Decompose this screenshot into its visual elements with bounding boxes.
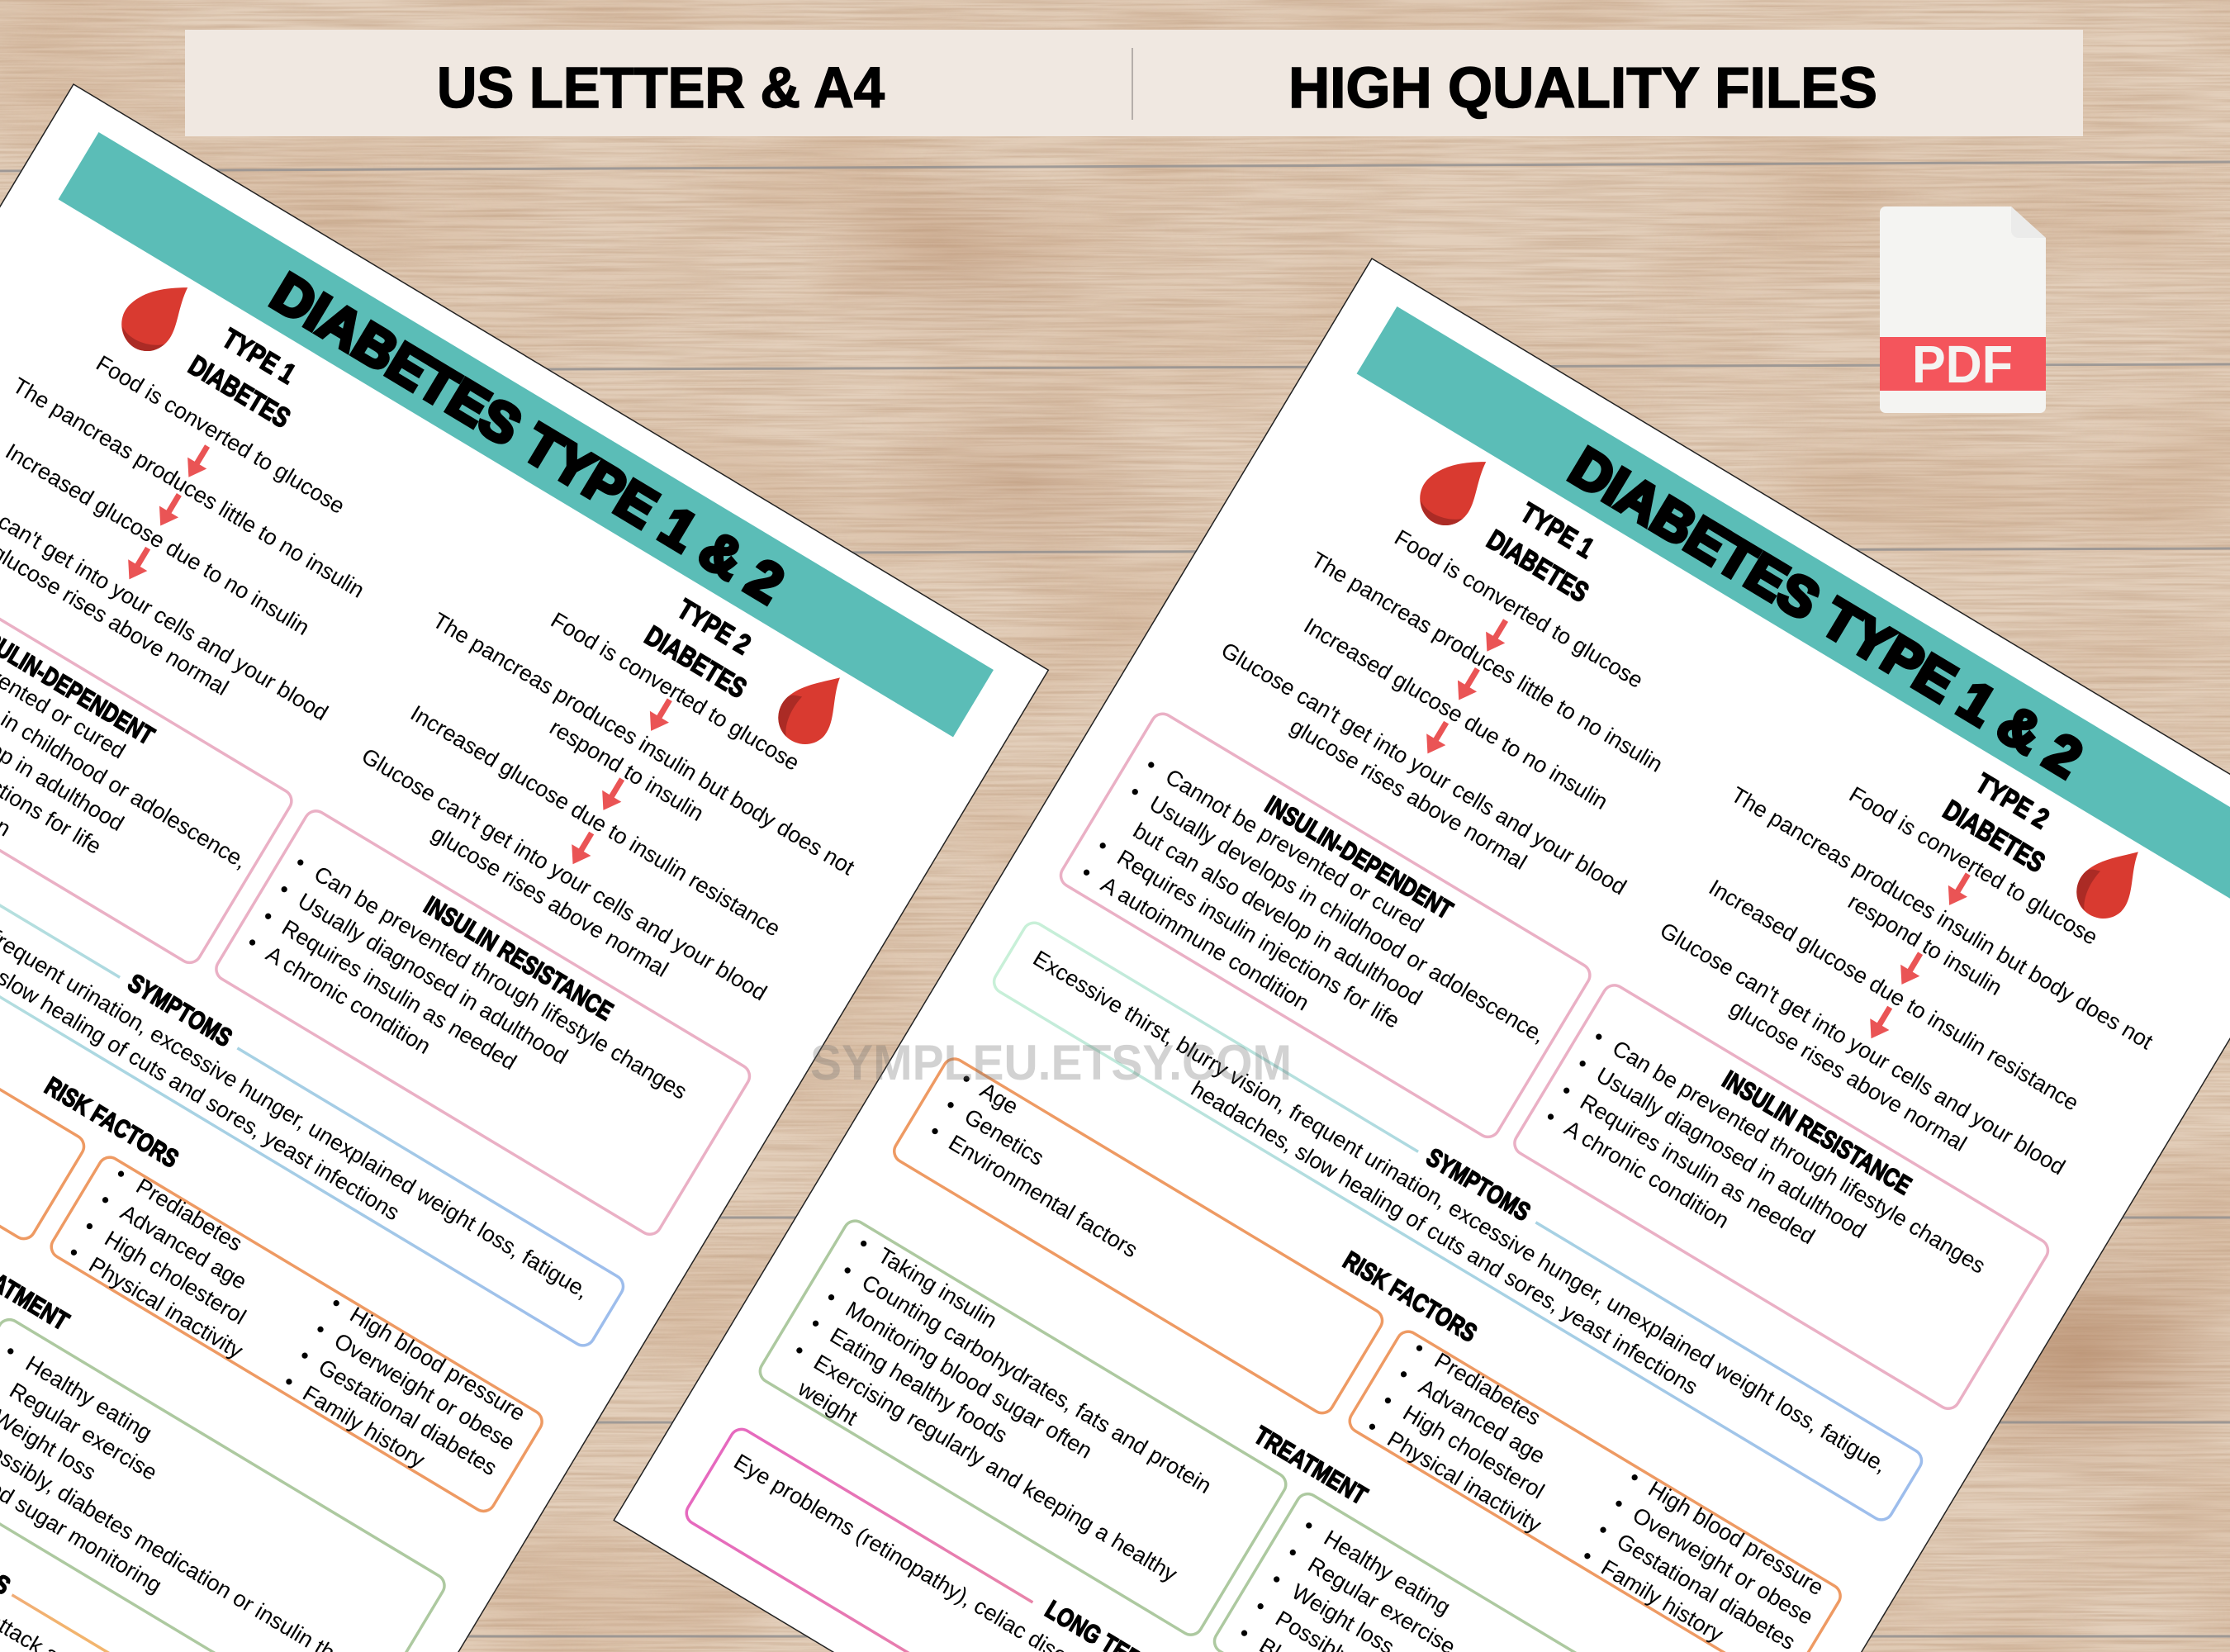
heading: type 1: TYPE 1 xyxy=(216,323,301,391)
panel: risk factors type 2: • xyxy=(311,1317,330,1342)
panel: insulin-dependent: • xyxy=(1126,779,1145,805)
panel: risk factors type 2: • xyxy=(1609,1491,1629,1517)
heading: risk factors: RISK FACTORS xyxy=(1338,1246,1482,1348)
panel: insulin resistance: Requires insulin as needed xyxy=(1576,1089,1820,1249)
flow: type 1: The pancreas produces little to no insulin xyxy=(8,373,368,603)
panel: insulin resistance: • xyxy=(243,930,262,955)
panel: risk factors type 2 xyxy=(47,1151,548,1516)
heading: type 1: DIABETES xyxy=(183,349,296,434)
heading: type 1 xyxy=(1482,489,1615,609)
flow: type 1: Glucose can't get into your cells and your blood xyxy=(1217,638,1630,900)
banner text: quality: HIGH QUALITY FILES xyxy=(1288,55,1877,120)
panel: risk factors type 2: High cholesterol xyxy=(1399,1400,1549,1504)
panel: risk factors type 2: • xyxy=(295,1343,315,1368)
panel: risk factors type 2: Family history xyxy=(1597,1555,1728,1647)
panel: risk factors type 2: Family history xyxy=(298,1380,429,1473)
panel: insulin-dependent xyxy=(0,535,296,967)
panel: treatment type 1: • xyxy=(854,1231,873,1256)
panel: risk factors type 2: High blood pressure xyxy=(346,1302,529,1426)
panel: long term xyxy=(682,1409,1633,1652)
panel: risk factors type 2: High cholesterol xyxy=(101,1226,250,1330)
page: left worksheet xyxy=(0,84,1048,1652)
flow: type 1: Food is converted to glucose xyxy=(1390,525,1648,693)
panel: treatment type 1: • xyxy=(790,1338,809,1363)
heading: type 1 xyxy=(183,315,316,434)
flow: type 2: Increased glucose due to insulin resistance xyxy=(406,700,785,942)
flow: type 2: respond to insulin xyxy=(545,714,708,826)
panel: insulin resistance xyxy=(1511,981,2052,1412)
panel: insulin-dependent: Requires insulin injections for life xyxy=(1113,845,1404,1033)
panel: insulin resistance: Can be prevented through lifestyle changes xyxy=(1608,1036,1990,1279)
panel: insulin resistance: • xyxy=(259,904,278,929)
banner text: format: US LETTER & A4 xyxy=(437,55,885,120)
panel: risk factors type 2: • xyxy=(1593,1517,1613,1542)
panel: risk factors type 1 xyxy=(0,881,88,1243)
heading: type 1: DIABETES xyxy=(1482,524,1594,609)
panel: risk factors type 2: Gestational diabetes xyxy=(314,1355,501,1480)
panel: treatment type 1: Eating healthy foods xyxy=(826,1322,1012,1448)
panel: risk factors type 1: • xyxy=(941,1092,961,1118)
panel: insulin resistance: INSULIN RESISTANCE xyxy=(420,890,618,1026)
watermark: SYMPLEU.ETSY.COM xyxy=(810,1035,1292,1090)
panel: treatment type 1: Monitoring blood sugar often xyxy=(842,1297,1097,1464)
panel: insulin resistance: • xyxy=(1573,1051,1592,1076)
panel: risk factors type 2: Physical inactivity xyxy=(84,1252,248,1364)
panel: treatment type 1: weight xyxy=(793,1375,862,1431)
icon: PDF file: PDF xyxy=(1912,335,2013,394)
panel: risk factors type 2: Advanced age xyxy=(116,1199,251,1294)
icon: blood drop type 2 xyxy=(2066,833,2152,928)
panel: risk factors type 2: Overweight or obese xyxy=(1628,1502,1817,1630)
panel: treatment type 2: Healthy eating xyxy=(1320,1526,1454,1620)
panel: risk factors type 2: • xyxy=(96,1187,115,1213)
heading: type 2 xyxy=(1938,760,2071,879)
panel: insulin resistance: Can be prevented through lifestyle changes xyxy=(310,862,691,1104)
heading: type 2: TYPE 2 xyxy=(671,593,756,661)
panel: treatment type 2: • xyxy=(1,1339,21,1364)
panel: risk factors type 1 xyxy=(890,1055,1387,1417)
panel: risk factors type 2: • xyxy=(1363,1414,1382,1440)
panel: insulin resistance: • xyxy=(274,876,294,902)
panel: risk factors type 2: • xyxy=(1578,1543,1597,1569)
panel: insulin-dependent: but can also develop in adulthood xyxy=(1129,818,1426,1010)
panel: insulin resistance: A chronic condition xyxy=(262,942,435,1059)
panel: treatment type 1: • xyxy=(837,1258,857,1283)
flow: type 2: Food is converted to glucose xyxy=(1845,781,2102,950)
flow: type 1 xyxy=(1202,478,1726,925)
panel: insulin resistance: INSULIN RESISTANCE xyxy=(1718,1065,1916,1200)
panel: risk factors type 2: • xyxy=(279,1369,299,1394)
icon: blood drop type 1 xyxy=(1410,440,1495,535)
panel: insulin-dependent: Usually develops in childhood or adolescence, xyxy=(1146,791,1550,1048)
icon: PDF file xyxy=(1880,206,2046,413)
top banner xyxy=(185,30,2083,136)
panel: insulin resistance: Usually diagnosed in adulthood xyxy=(1592,1062,1871,1243)
panel: symptoms: SYMPTOMS xyxy=(123,968,237,1052)
panel: treatment type 2: Regular exercise xyxy=(5,1378,161,1485)
flow: type 2: glucose rises above normal xyxy=(1725,995,1971,1156)
flow: type 1: Increased glucose due to no insulin xyxy=(1300,613,1612,814)
panel: risk factors type 1: • xyxy=(925,1118,945,1144)
panel: risk factors type 2: Prediabetes xyxy=(132,1174,247,1256)
panel: risk factors type 1: Age xyxy=(976,1078,1022,1119)
panel: risk factors type 2: • xyxy=(80,1213,99,1239)
panel: treatment type 2: • xyxy=(1299,1513,1319,1538)
flow: type 2: Glucose can't get into your cells and your blood xyxy=(358,743,771,1005)
title banner xyxy=(59,132,994,737)
heading: type 2: DIABETES xyxy=(1938,795,2050,879)
panel: treatment type 2 xyxy=(1210,1489,1747,1652)
heading: risk factors: RISK FACTORS xyxy=(40,1071,183,1174)
panel: symptoms: SYMPTOMS xyxy=(1421,1142,1535,1227)
flow: type 1: Increased glucose due to no insulin xyxy=(2,439,314,640)
panel: insulin-dependent: INSULIN-DEPENDENT xyxy=(1260,790,1458,924)
panel: treatment type 2: • xyxy=(1250,1593,1270,1619)
panel: insulin-dependent: Cannot be prevented or cured xyxy=(1161,764,1428,938)
panel: risk factors type 2: • xyxy=(1625,1464,1644,1490)
panel: insulin-dependent: • xyxy=(1077,860,1096,885)
panel: risk factors type 2: Gestational diabetes xyxy=(1612,1529,1800,1652)
panel: risk factors type 2 xyxy=(1345,1325,1846,1652)
panel: insulin-dependent xyxy=(1056,710,1594,1142)
panel: insulin resistance: • xyxy=(1589,1024,1609,1049)
heading: type 2 xyxy=(639,586,772,705)
panel: insulin resistance: • xyxy=(1557,1078,1576,1104)
flow: type 2: Food is converted to glucose xyxy=(547,607,804,776)
icon: blood drop type 2 xyxy=(768,659,854,754)
panel: insulin resistance: A chronic condition xyxy=(1560,1116,1734,1233)
panel: insulin-dependent: A autoimmune condition xyxy=(1097,871,1313,1016)
panel: risk factors type 2: • xyxy=(1378,1388,1397,1413)
panel: risk factors type 2: • xyxy=(112,1161,130,1186)
panel: treatment type 2 xyxy=(0,1315,448,1652)
panel: treatment type 2: • xyxy=(1267,1567,1286,1592)
panel: insulin resistance: Usually diagnosed in adulthood xyxy=(294,888,572,1069)
panel: risk factors type 2: Physical inactivity xyxy=(1383,1427,1546,1538)
flow: type 2: Glucose can't get into your cells and your blood xyxy=(1656,918,2070,1180)
flow: type 2: Increased glucose due to insulin resistance xyxy=(1705,875,2083,1116)
panel: risk factors type 2: Prediabetes xyxy=(1431,1348,1545,1431)
flow: type 1: glucose rises above normal xyxy=(1286,714,1531,875)
panel: treatment type 1: Taking insulin xyxy=(874,1243,1001,1333)
heading: type 1: TYPE 1 xyxy=(1515,497,1599,565)
panel: risk factors type 2: • xyxy=(1394,1361,1413,1387)
title banner xyxy=(1357,306,2230,911)
flow: type 2: The pancreas produces insulin but body does not xyxy=(1727,782,2157,1055)
heading: type 2: TYPE 2 xyxy=(1970,767,2054,835)
title: DIABETES TYPE 1 & 2 xyxy=(261,261,794,615)
panel: insulin resistance: • xyxy=(291,850,311,875)
panel: treatment type 1: • xyxy=(806,1311,825,1336)
panel: risk factors type 2: • xyxy=(326,1290,346,1316)
heading: type 2: DIABETES xyxy=(639,620,752,705)
panel: treatment type 2: • xyxy=(1283,1540,1302,1565)
panel: treatment type 2: • xyxy=(1235,1621,1254,1645)
panel: symptoms: headaches, slow healing of cuts and sores, yeast infections xyxy=(1187,1076,1702,1399)
panel: risk factors type 2: Advanced age xyxy=(1415,1374,1549,1469)
title: DIABETES TYPE 1 & 2 xyxy=(1559,435,2092,790)
panel: treatment type 1: Counting carbohydrates, fats and protein xyxy=(857,1270,1216,1498)
panel: symptoms: Excessive thirst, blurry vision, frequent urination, excessive hunger, unexplained weight loss, fatigue, xyxy=(1029,946,1891,1478)
flow: type 2: glucose rises above normal xyxy=(427,821,672,982)
panel: risk factors type 2: Overweight or obese xyxy=(330,1328,519,1455)
panel: treatment type 1 xyxy=(756,1217,1290,1639)
flow: type 1: The pancreas produces little to no insulin xyxy=(1307,547,1667,777)
panel: risk factors type 2: • xyxy=(64,1240,83,1265)
flow: type 1: Food is converted to glucose xyxy=(92,350,349,519)
panel: treatment type 2: Healthy eating xyxy=(21,1351,156,1446)
panel: insulin-dependent: • xyxy=(1141,752,1161,777)
panel: insulin resistance: Requires insulin as needed xyxy=(278,915,521,1075)
panel: long term xyxy=(0,1235,334,1652)
panel: risk factors type 1: Environmental factors xyxy=(944,1130,1142,1262)
panel: insulin-dependent: • xyxy=(1093,833,1113,858)
panel: insulin resistance xyxy=(212,807,754,1238)
panel: insulin resistance: • xyxy=(1541,1104,1560,1129)
panel: risk factors type 1: Genetics xyxy=(960,1104,1048,1170)
page: right worksheet xyxy=(614,259,2230,1652)
panel: risk factors type 1: • xyxy=(956,1066,976,1091)
flow: type 2 xyxy=(1632,729,2189,1212)
flow: type 2: respond to insulin xyxy=(1843,889,2006,1000)
panel: treatment type 1: • xyxy=(822,1284,841,1310)
heading: treatment: TREATMENT xyxy=(1249,1421,1373,1510)
panel: risk factors type 2: • xyxy=(1410,1336,1429,1360)
icon: blood drop type 1 xyxy=(112,266,197,361)
flow: type 1 xyxy=(0,304,428,751)
flow: type 2 xyxy=(334,555,890,1037)
panel: risk factors type 2: High blood pressure xyxy=(1644,1476,1828,1600)
flow: type 2: The pancreas produces insulin but body does not xyxy=(429,608,859,881)
panel: treatment type 1: Exercising regularly and keeping a healthy xyxy=(809,1350,1182,1587)
